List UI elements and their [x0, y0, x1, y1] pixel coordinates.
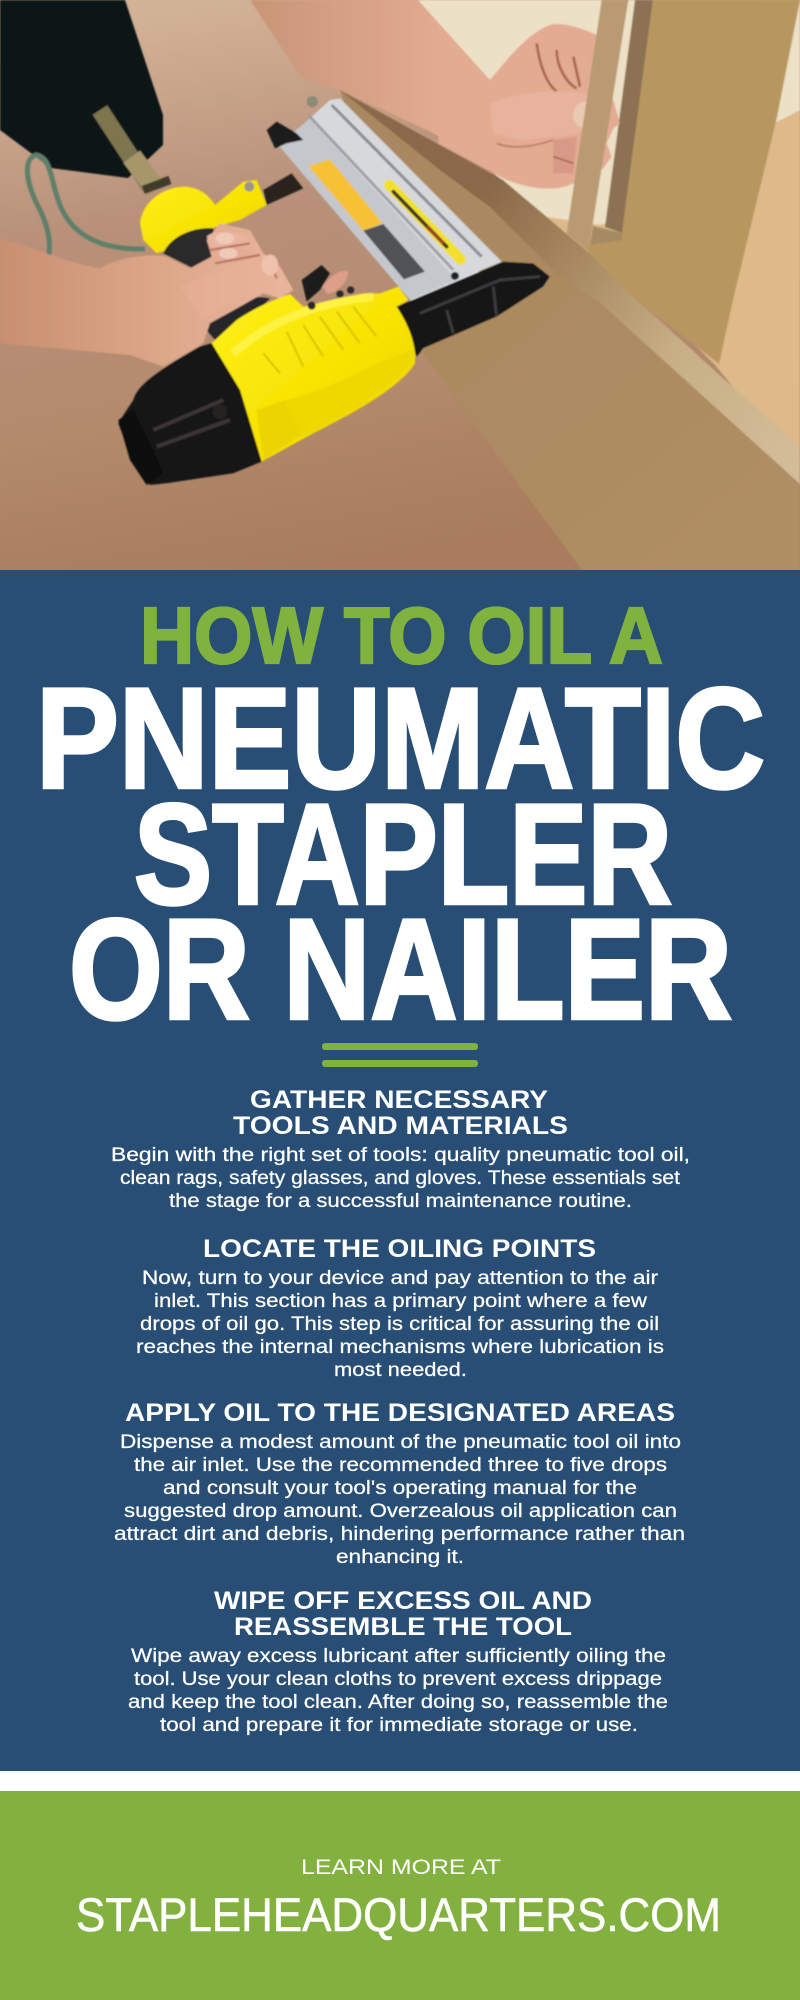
section: locate the oiling points — [136, 1235, 664, 1381]
body text: Wipe away excess lubricant after sufficiently oiling the — [131, 1646, 666, 1667]
heading — [214, 1587, 592, 1641]
body text: tool and prepare it for immediate storage or use. — [160, 1715, 638, 1736]
heading — [233, 1086, 568, 1140]
body text: and keep the tool clean. After doing so, reassemble the — [128, 1692, 668, 1713]
heading: GATHER NECESSARY — [250, 1086, 548, 1114]
panel: green footer — [0, 1791, 800, 2000]
body text: the stage for a successful maintenance routine. — [169, 1191, 632, 1212]
heading: REASSEMBLE THE TOOL — [234, 1613, 572, 1641]
body text: inlet. This section has a primary point where a few — [154, 1291, 647, 1312]
section: wipe off excess oil and reassemble the tool — [128, 1587, 668, 1736]
body text: attract dirt and debris, hindering performance rather than — [114, 1524, 685, 1545]
body text: clean rags, safety glasses, and gloves. These essentials set — [120, 1168, 681, 1189]
body text — [111, 1145, 690, 1212]
body text: enhancing it. — [336, 1547, 464, 1568]
body text — [128, 1646, 668, 1736]
body text: tool. Use your clean cloths to prevent excess drippage — [134, 1669, 662, 1690]
thin strip of the vertical board — [567, 0, 628, 252]
body text: suggested drop amount. Overzealous oil application can — [124, 1501, 677, 1522]
divider: double green bars — [322, 1043, 478, 1067]
upper arm and hand — [250, 0, 487, 136]
body text: Now, turn to your device and pay attention to the air — [142, 1268, 659, 1289]
body text: the air inlet. Use the recommended three to five drops — [134, 1455, 667, 1476]
body text: and consult your tool's operating manual for the — [163, 1478, 637, 1499]
heading: LOCATE THE OILING POINTS — [203, 1235, 596, 1263]
footer label: LEARN MORE AT — [301, 1856, 501, 1879]
body text: most needed. — [334, 1360, 467, 1381]
title block — [36, 591, 765, 1050]
heading: TOOLS AND MATERIALS — [233, 1112, 568, 1140]
photo: hands using a yellow pneumatic stapler on a board — [0, 0, 800, 570]
stapler and gripping hand — [0, 96, 550, 485]
body text: drops of oil go. This step is critical for assuring the oil — [140, 1314, 659, 1335]
body text — [136, 1268, 664, 1381]
title line: stapler: STAPLER — [134, 776, 672, 934]
panel: navy content background — [0, 570, 800, 1771]
body text: reaches the internal mechanisms where lubrication is — [136, 1337, 664, 1358]
heading: APPLY OIL TO THE DESIGNATED AREAS — [125, 1399, 675, 1427]
footer url: STAPLEHEADQUARTERS.COM — [76, 1888, 721, 1941]
section: gather necessary tools and materials — [111, 1086, 690, 1212]
section: apply oil to the designated areas — [114, 1399, 685, 1568]
heading: WIPE OFF EXCESS OIL AND — [214, 1587, 592, 1615]
body text: Begin with the right set of tools: quality pneumatic tool oil, — [111, 1145, 690, 1166]
body text — [114, 1432, 685, 1568]
body text: Dispense a modest amount of the pneumatic tool oil into — [120, 1432, 681, 1453]
title line: how to oil a: HOW TO OIL A — [140, 591, 663, 680]
